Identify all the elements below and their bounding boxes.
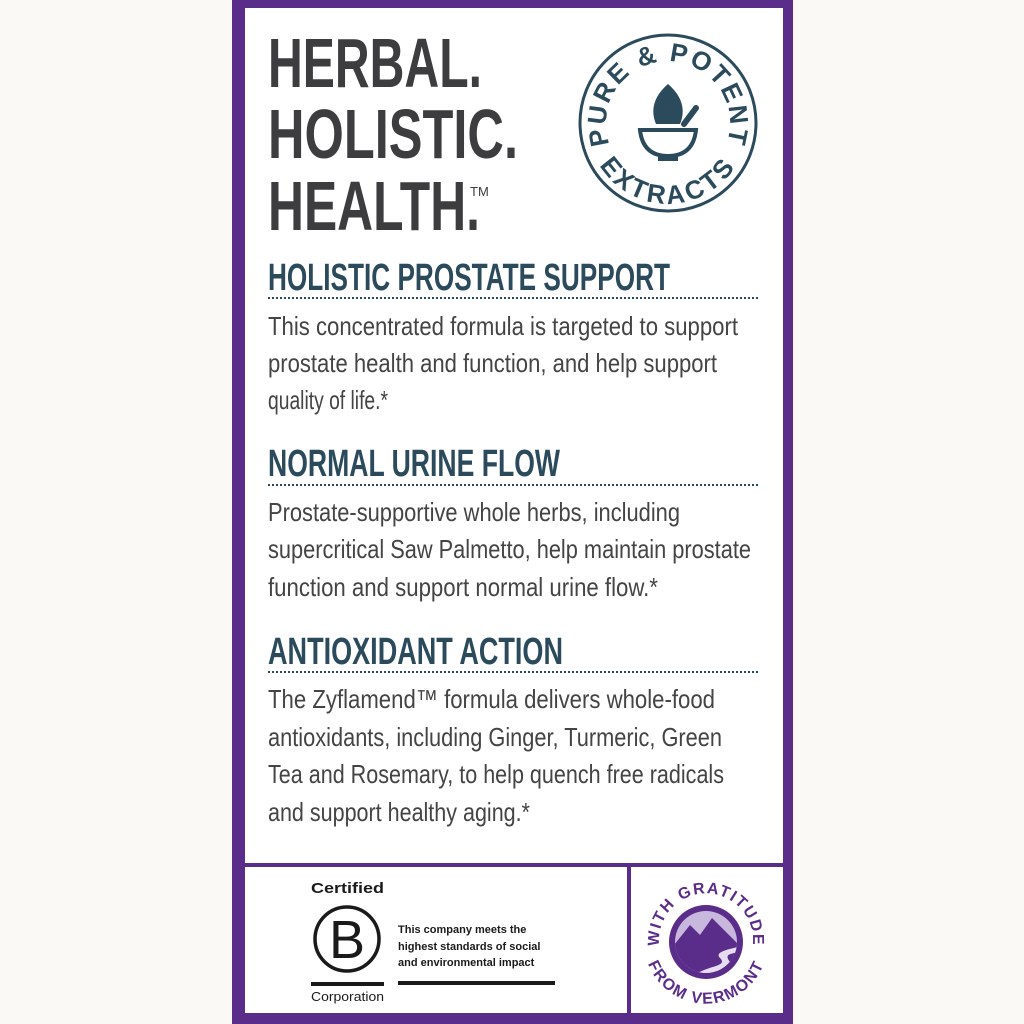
B corp logo: Certified	[311, 880, 384, 897]
badge: with gratitude from vermont	[648, 882, 764, 1004]
section: antioxidant action	[268, 631, 758, 827]
section: holistic prostate support: This concentrated formula is targeted to support	[268, 311, 739, 341]
B corp logo: B	[329, 910, 365, 970]
white bottom left panel	[245, 867, 627, 1013]
badge: with gratitude from vermont: FROM VERMONT	[648, 960, 762, 1004]
B corp statement	[398, 924, 540, 969]
purple frame	[232, 0, 793, 1024]
B corp statement: highest standards of social	[398, 941, 540, 953]
section: antioxidant action: and support healthy aging.*	[268, 797, 530, 827]
section: normal urine flow: NORMAL URINE FLOW	[268, 443, 560, 485]
section: holistic prostate support: prostate health and function, and help support	[268, 348, 718, 378]
section: normal urine flow: function and support normal urine flow.*	[268, 572, 658, 602]
badge: pure & potent extracts: PURE & POTENT	[588, 43, 748, 146]
section: normal urine flow: supercritical Saw Palmetto, help maintain prostate	[268, 534, 751, 564]
title	[268, 24, 518, 245]
title: TM	[470, 184, 489, 199]
B corp statement: This company meets the	[398, 924, 526, 936]
badge: with gratitude from vermont: WITH GRATITUDE	[648, 882, 764, 946]
section: normal urine flow	[268, 443, 758, 602]
section: holistic prostate support	[268, 257, 758, 415]
section: antioxidant action: ANTIOXIDANT ACTION	[268, 631, 563, 673]
badge: pure & potent extracts: EXTRACTS	[600, 156, 732, 204]
white main panel	[245, 8, 783, 863]
icon: leaf in mortar	[640, 84, 696, 161]
white bottom right panel	[631, 867, 783, 1013]
section: antioxidant action: antioxidants, including Ginger, Turmeric, Green	[268, 722, 722, 752]
B corp statement: and environmental impact	[398, 957, 535, 969]
title: HOLISTIC.	[268, 95, 518, 173]
section: holistic prostate support: HOLISTIC PROSTATE SUPPORT	[268, 257, 670, 299]
B corp logo: Corporation	[311, 989, 384, 1004]
badge: pure & potent extracts	[578, 34, 758, 212]
section: antioxidant action: The Zyflamend™ formula delivers whole-food	[268, 684, 715, 714]
section: holistic prostate support: quality of life.*	[268, 385, 388, 415]
B corp logo	[311, 880, 555, 1004]
section: antioxidant action: Tea and Rosemary, to help quench free radicals	[268, 759, 724, 789]
title: HEALTH.	[268, 167, 480, 245]
title: HERBAL.	[268, 24, 482, 102]
section: normal urine flow: Prostate-supportive whole herbs, including	[268, 497, 680, 527]
